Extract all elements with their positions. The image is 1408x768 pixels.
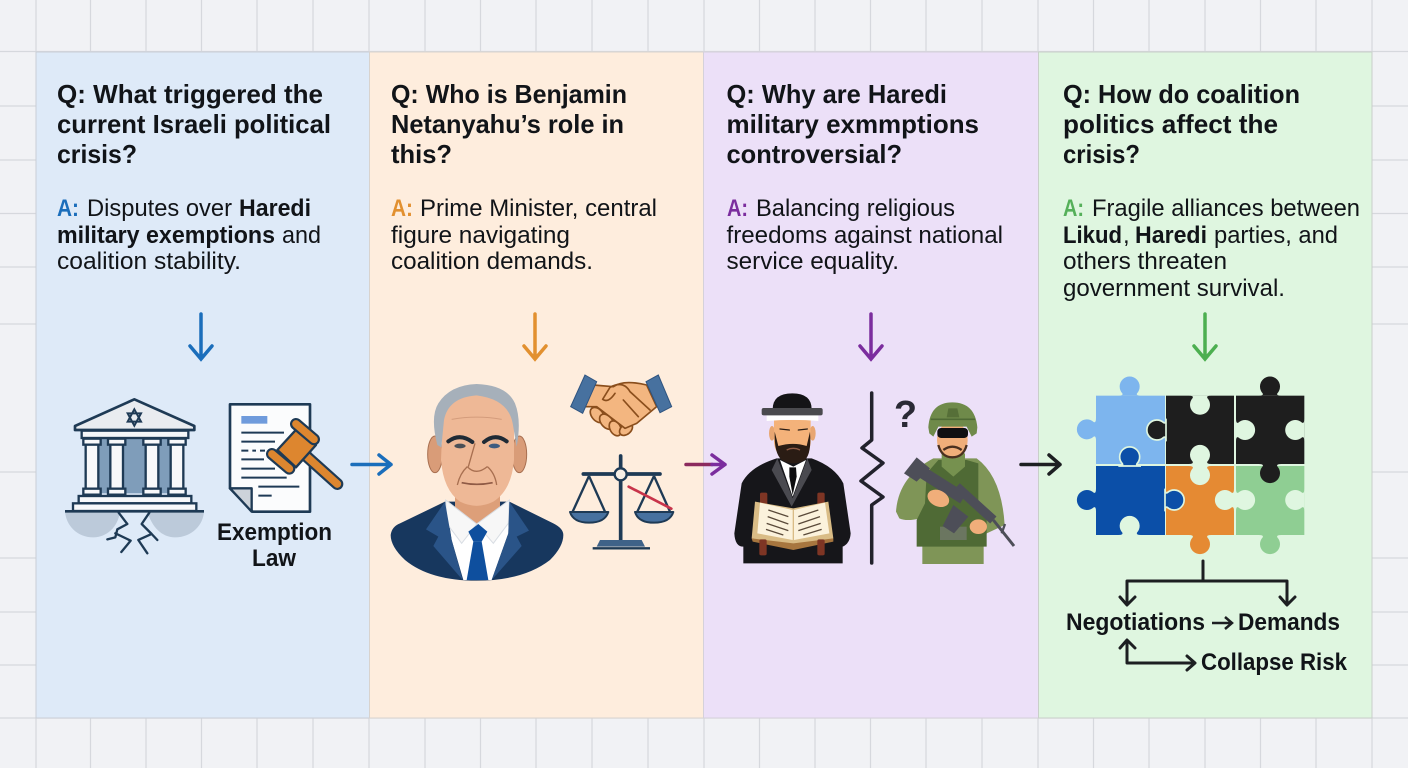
arrow: blue to orange panel <box>352 455 391 474</box>
label: negotiations to demands: Negotiations <box>1066 609 1205 636</box>
illustration: soldier with rifle <box>896 402 1014 564</box>
puzzle notches <box>1189 396 1304 511</box>
question 3 heading: Q: Why are Haredi <box>726 79 947 109</box>
illustration: haredi man with open book <box>734 393 851 563</box>
answer 3 text: Balancing religious <box>756 195 955 222</box>
answer 1 text: A: <box>57 195 79 222</box>
arrow: purple to green panel <box>1021 455 1060 474</box>
arrow: down green <box>1194 314 1216 359</box>
flow: branching arrows from puzzle <box>1120 561 1295 605</box>
answer 1 text: coalition stability. <box>57 248 241 275</box>
arrow: down blue <box>190 314 212 359</box>
icon: six-piece puzzle <box>1077 377 1304 554</box>
answer 4 text: Haredi <box>1135 222 1207 249</box>
arrow: down purple <box>860 314 882 359</box>
answer 3 text: A: <box>727 195 748 222</box>
answer 1 text <box>57 195 321 275</box>
piece: black right <box>1236 377 1304 483</box>
answer 2 text: figure navigating <box>391 222 570 249</box>
question 4 heading <box>1063 79 1300 169</box>
icon: exemption law document with gavel <box>230 404 337 512</box>
answer 4 text: others threaten <box>1063 248 1227 275</box>
answer 4 text: A: <box>1063 195 1084 222</box>
question 3 heading <box>726 79 979 169</box>
question 3 heading: controversial? <box>726 139 902 169</box>
icon: handshake <box>571 375 672 438</box>
question 4 heading: Q: How do coalition <box>1063 79 1300 109</box>
label: exemption law: Law <box>252 545 296 572</box>
question 2 heading: this? <box>391 139 452 169</box>
label: negotiations to demands <box>1066 609 1340 636</box>
panel: netanyahu's role <box>370 52 704 718</box>
label: collapse risk: Collapse Risk <box>1201 649 1348 676</box>
panel: coalition politics <box>1038 52 1372 718</box>
label: exemption law <box>217 519 332 572</box>
piece: orange <box>1166 466 1234 554</box>
answer 2 text: A: <box>391 195 413 222</box>
illustration: benjamin netanyahu portrait <box>391 384 563 581</box>
arrow: down orange <box>524 314 546 359</box>
answer 3 text: service equality. <box>726 248 899 275</box>
answer 3 text <box>726 195 1003 275</box>
answer 4 text: government survival. <box>1063 275 1285 302</box>
question 1 heading: Q: What triggered the <box>57 79 323 109</box>
answer 4 text: parties, and <box>1214 222 1338 249</box>
flow: loop arrow to collapse risk <box>1120 640 1195 670</box>
icon: balance scales with red slash <box>570 456 673 548</box>
piece: green <box>1236 466 1304 554</box>
question 1 heading: current Israeli political <box>57 109 331 139</box>
question 2 heading <box>391 79 627 169</box>
panel: what triggered the crisis <box>36 52 370 718</box>
answer 2 text: coalition demands. <box>391 248 593 275</box>
answer 2 text: Prime Minister, central <box>420 195 657 222</box>
question 3 heading: military exmmptions <box>726 109 979 139</box>
icon: cracked government building <box>65 399 204 553</box>
icon: question mark: ? <box>894 394 917 436</box>
question 4 heading: crisis? <box>1063 139 1140 169</box>
answer 3 text: freedoms against national <box>726 222 1003 249</box>
question 1 heading: crisis? <box>57 139 137 169</box>
question 2 heading: Q: Who is Benjamin <box>391 79 627 109</box>
answer 2 text <box>391 195 657 275</box>
answer 4 text <box>1063 195 1360 302</box>
answer 1 text: Haredi <box>239 195 311 222</box>
answer 1 text: and <box>282 222 321 249</box>
answer 1 text: Disputes over <box>87 195 232 222</box>
question 2 heading: Netanyahu’s role in <box>391 109 624 139</box>
divider: zigzag line between figures <box>861 393 883 563</box>
answer 4 text: Fragile alliances between <box>1092 195 1360 222</box>
piece: light blue <box>1077 377 1165 464</box>
answer 1 text: military exemptions <box>57 222 275 249</box>
piece: dark blue <box>1077 447 1184 535</box>
answer 4 text: Likud <box>1063 222 1122 249</box>
label: negotiations to demands: Demands <box>1238 609 1340 636</box>
panel: haredi military exemptions <box>704 52 1038 718</box>
label: exemption law: Exemption <box>217 519 332 546</box>
question 1 heading <box>57 79 331 169</box>
arrow: orange to purple panel <box>686 455 725 474</box>
question 4 heading: politics affect the <box>1063 109 1278 139</box>
piece: black centre <box>1147 396 1234 464</box>
answer 4 text: , <box>1123 222 1130 249</box>
